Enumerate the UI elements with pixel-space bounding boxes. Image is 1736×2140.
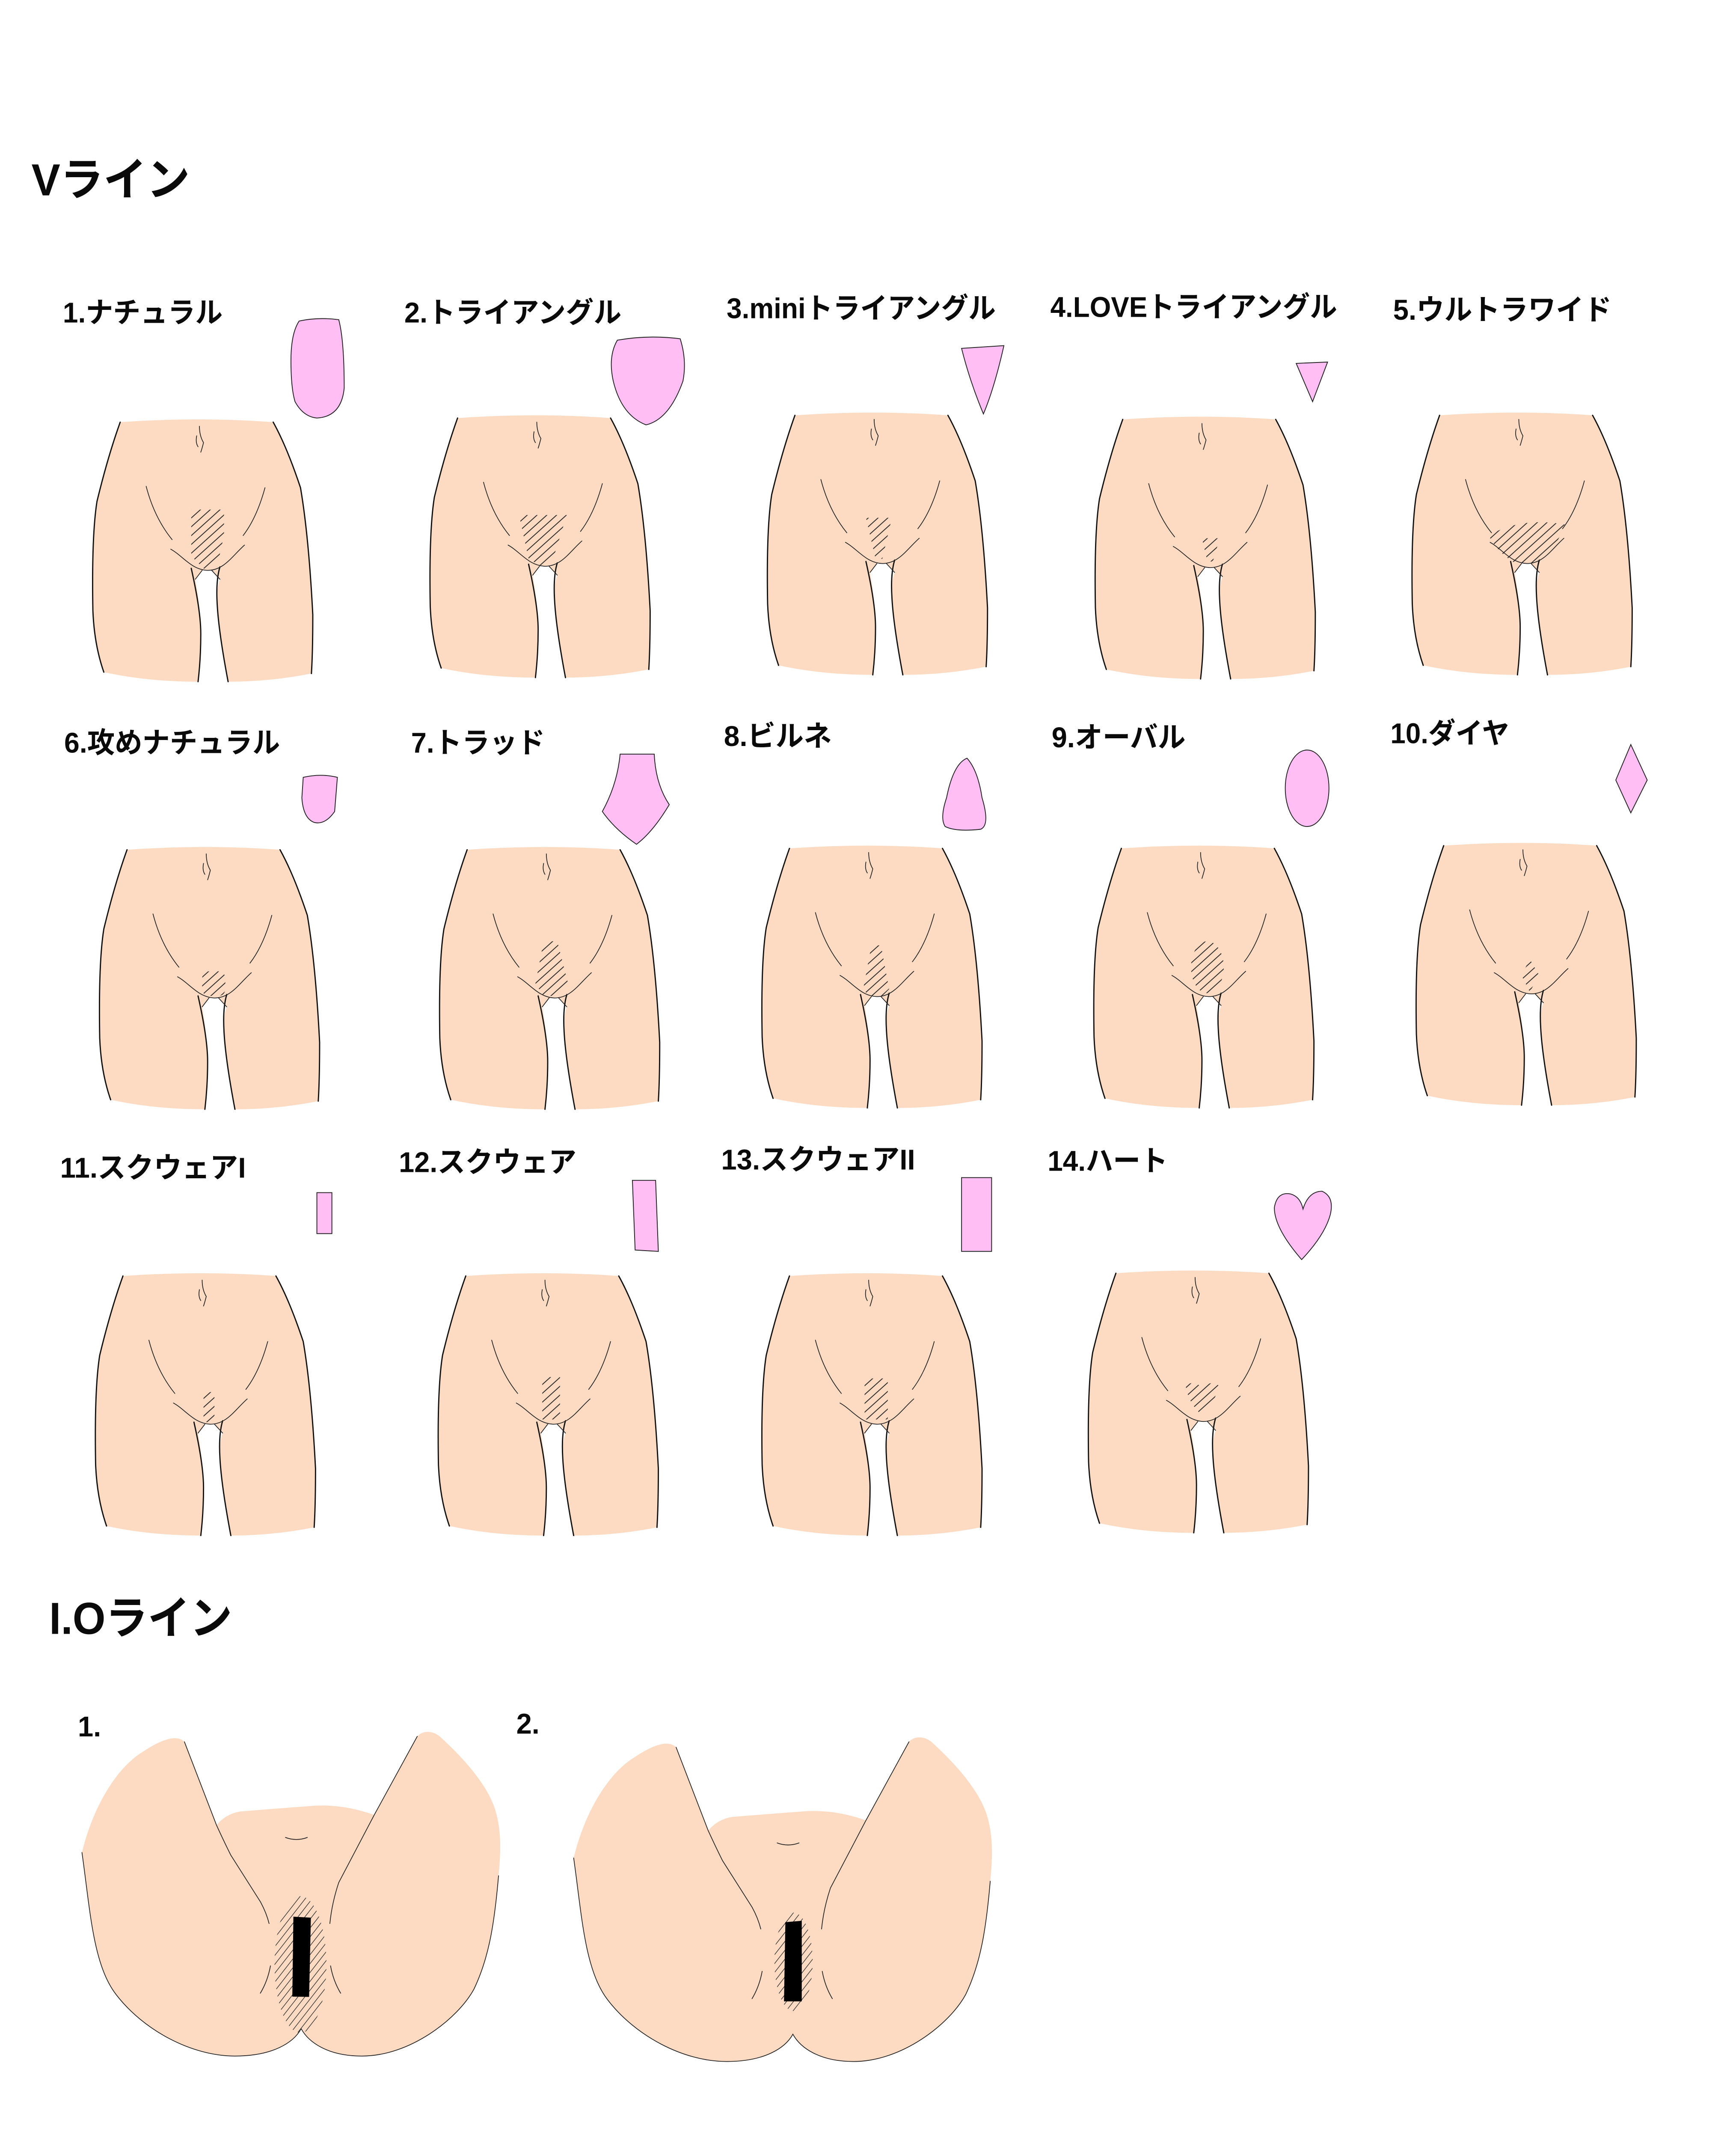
panel: 1 natural [63,297,344,682]
panel: 10 diamond [1390,717,1647,1105]
body figure 8 [762,846,982,1108]
label: I.O 2: 2. [516,1708,540,1740]
body figure 11 [95,1273,315,1536]
body figure 7 [439,847,660,1109]
hatch patch 1 [275,1896,326,2033]
icon: shape 3 [961,346,1004,414]
panel: 7 trad [411,727,669,1109]
panel: 6 aggressive natural [64,727,337,1109]
label: 2: 2.トライアングル [404,297,621,329]
icon: shape 2 [611,337,685,425]
panel: 13 square II [721,1144,991,1536]
censor bar 2 [784,1921,802,2001]
body figure 1 [92,419,313,682]
heading: V line: Vライン [31,155,190,205]
censor bar 1 [292,1917,311,1997]
icon: shape 4 [1296,362,1328,401]
label: 13: 13.スクウェアII [721,1144,915,1176]
icon: shape 14 [1274,1191,1331,1260]
panel: 14 heart [1048,1145,1331,1533]
label: 11: 11.スクウェアI [60,1152,246,1184]
label: 9: 9.オーバル [1052,722,1186,754]
body figure 10 [1416,843,1636,1105]
label: 5: 5.ウルトラワイド [1393,294,1612,326]
contour lines 2 [574,1742,990,2062]
label: 3: 3.miniトライアングル [727,293,996,325]
body figure 3 [767,413,988,675]
heading: I.O line: I.Oライン [49,1594,232,1644]
body figure 9 [1094,846,1314,1108]
icon: shape 8 [943,758,986,830]
icon: shape 13 [961,1177,991,1251]
panel: 4 love triangle [1051,291,1337,679]
icon: shape 1 [291,318,344,418]
label: 4: 4.LOVEトライアングル [1051,291,1337,324]
body figure 12 [438,1273,659,1536]
body figure 13 [762,1273,982,1536]
label: 12: 12.スクウェア [399,1147,576,1179]
panel: 5 ultra wide [1393,294,1632,675]
panel: I.O 1 [78,1711,500,2056]
label: 1: 1.ナチュラル [63,297,223,329]
panel: 3 mini triangle [727,293,1004,675]
panel: 12 square [399,1147,659,1536]
label: 6: 6.攻めナチュラル [64,727,280,759]
body figure 14 [1088,1270,1309,1533]
icon: shape 7 [602,754,669,844]
hatch patch 2 [775,1913,813,2011]
label: 10: 10.ダイヤ [1390,717,1509,749]
body figure 2 [430,415,650,678]
icon: shape 11 [317,1193,332,1233]
body figure 5 [1412,413,1632,675]
body figure 6 [99,847,320,1109]
panel: 8 bilne [724,720,986,1108]
body figure 4 [1095,417,1315,679]
silhouette 2 [574,1737,992,2062]
panel: 2 triangle [404,297,685,678]
icon: shape 10 [1616,745,1647,813]
panel: 11 square I [60,1152,332,1536]
label: 8: 8.ビルネ [724,720,832,752]
panel: 9 oval [1052,722,1329,1108]
contour lines 1 [82,1736,499,2056]
silhouette 1 [82,1732,500,2056]
label: 7: 7.トラッド [411,727,545,759]
icon: shape 12 [632,1180,659,1251]
panel: I.O 2 [516,1708,992,2062]
label: 14: 14.ハート [1048,1145,1168,1177]
icon: shape 6 [302,775,337,823]
icon: shape 9 [1285,750,1329,826]
label: I.O 1: 1. [78,1711,101,1743]
